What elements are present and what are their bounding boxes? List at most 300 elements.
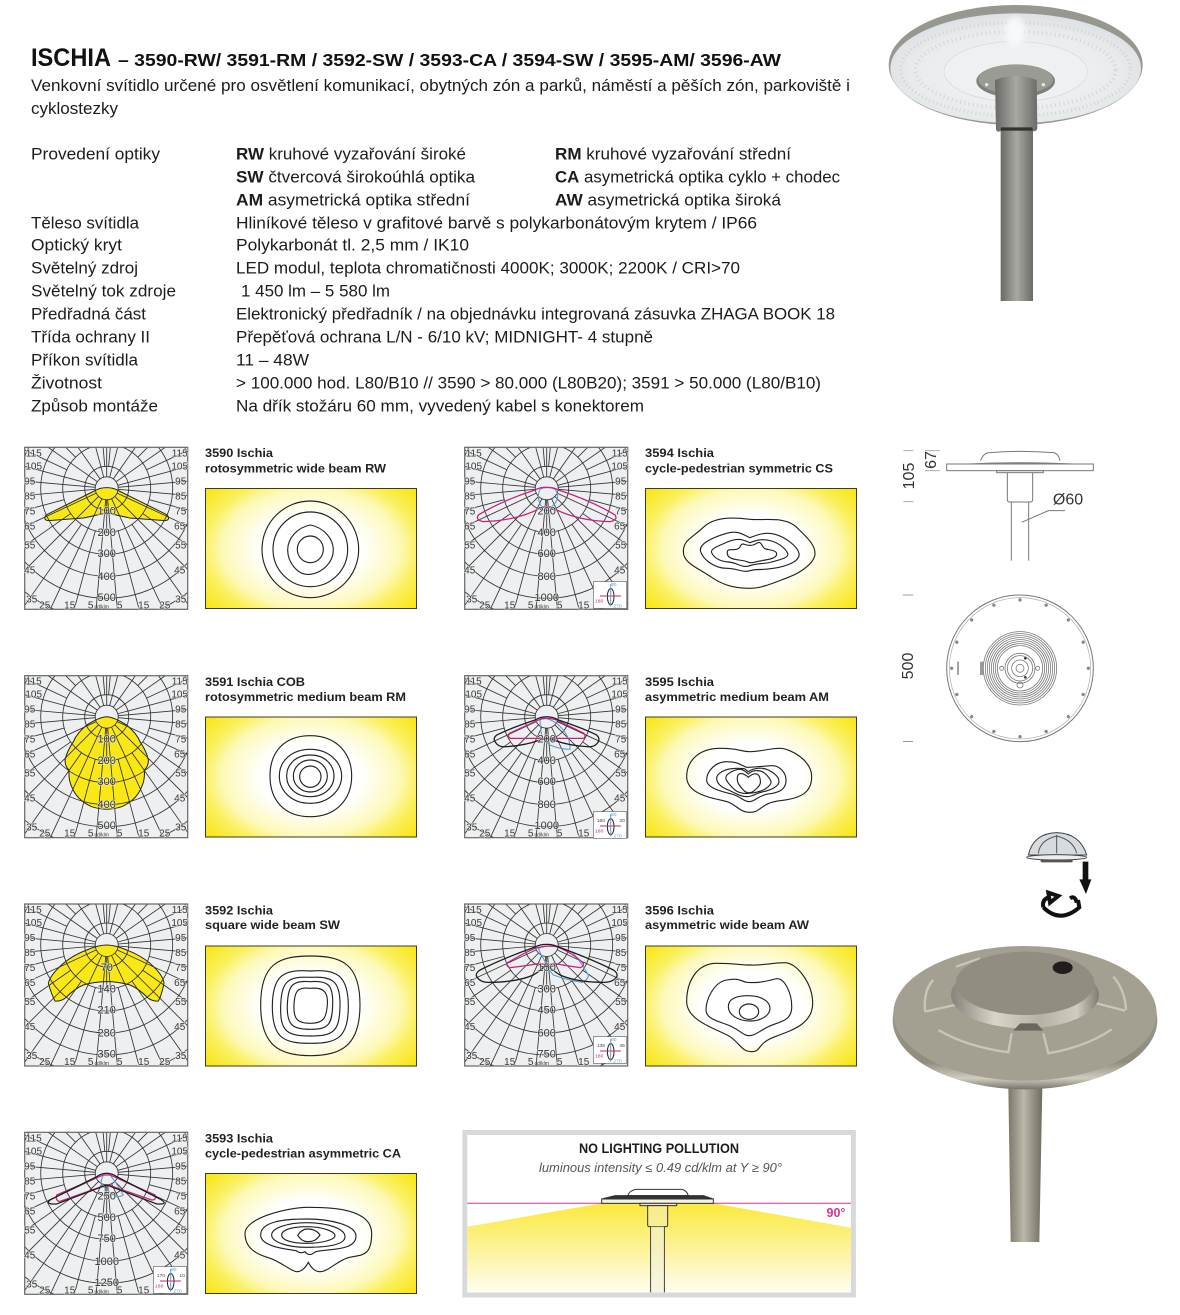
- polar chart 3593: 5: [117, 1285, 123, 1296]
- polar chart 3595: 95: [464, 705, 476, 716]
- polar chart 3594: 1000: [534, 592, 559, 604]
- panel: no lighting pollution: [465, 1132, 853, 1295]
- polar chart 3592: 70: [101, 962, 113, 974]
- polar chart 3592: 65: [174, 978, 186, 989]
- polar chart 3591: 55: [24, 769, 36, 780]
- inset: C-plane key: [593, 582, 627, 609]
- panel heading: NO LIGHTING POLLUTION: [579, 1141, 739, 1156]
- heading 3590: [205, 446, 387, 476]
- polar chart 3593: 105: [171, 1146, 188, 1157]
- illuminance map 3594: [646, 488, 856, 608]
- polar chart 3593: 65: [24, 1206, 36, 1217]
- spec row: cover: [31, 236, 469, 254]
- polar chart 3591: 35: [175, 823, 187, 834]
- polar chart 3590: 105: [25, 461, 42, 472]
- inset: C-plane key: 90: [611, 582, 617, 588]
- polar chart 3594: 65: [614, 521, 626, 532]
- polar chart 3592: 75: [175, 963, 187, 974]
- polar chart 3590: 200: [98, 527, 116, 539]
- inset: C-plane key: 90: [611, 1037, 617, 1043]
- polar chart 3590: 95: [24, 476, 36, 487]
- polar chart 3594: 5: [528, 600, 534, 611]
- polar chart 3596: 5: [528, 1057, 534, 1068]
- inset: C-plane key: [593, 1037, 627, 1064]
- polar chart 3594: 15: [578, 600, 590, 611]
- polar chart 3591: 15: [138, 829, 150, 840]
- polar chart 3591: 75: [24, 735, 36, 746]
- polar chart 3595: 5: [528, 829, 534, 840]
- polar chart 3591: 200: [98, 755, 116, 767]
- polar chart 3595: 25: [479, 829, 491, 840]
- polar chart 3594: 95: [464, 476, 476, 487]
- polar chart 3593: 105: [25, 1146, 42, 1157]
- polar chart 3591: 85: [175, 720, 187, 731]
- inset: C-plane key: 135: [597, 1043, 605, 1049]
- polar chart 3592: 15: [64, 1057, 76, 1068]
- polar chart 3590: 75: [175, 506, 187, 517]
- polar chart 3596: 750: [538, 1048, 556, 1060]
- heading 3592: 3592 Ischia: [205, 904, 273, 918]
- polar chart 3595: 55: [464, 769, 476, 780]
- polar chart 3592: 95: [24, 933, 36, 944]
- polar chart 3595: 115: [466, 677, 482, 688]
- polar chart 3591: 400: [98, 799, 116, 811]
- polar chart 3594: 200: [538, 505, 556, 517]
- polar chart 3591: 95: [24, 705, 36, 716]
- spec row: optics variants: Provedení optiky: [31, 144, 160, 164]
- spec row: optics variants: [31, 144, 840, 210]
- photometric panel: 3591 rotosymmetric medium beam RM: [24, 675, 417, 838]
- polar chart 3594: 25: [479, 600, 491, 611]
- description text: cyklostezky: [31, 99, 118, 118]
- polar chart 3596: 300: [538, 984, 556, 996]
- spec row: mounting: Způsob montáže: [31, 396, 158, 416]
- polar chart 3596: 25: [479, 1057, 491, 1068]
- heading 3594: [645, 446, 833, 476]
- spec row: power: [31, 350, 309, 370]
- heading 3590: rotosymmetric wide beam RW: [205, 462, 387, 476]
- title: ISCHIA: [31, 44, 111, 72]
- spec row: protection class: [31, 328, 653, 346]
- polar chart 3593: 55: [175, 1225, 187, 1236]
- polar chart 3590: 85: [175, 491, 187, 502]
- spec row: optics variants: SW čtvercová širokoúhlá optika: [236, 168, 476, 186]
- polar chart 3593: 1000: [94, 1256, 119, 1268]
- heading 3592: square wide beam SW: [205, 918, 341, 932]
- polar chart 3590: 65: [174, 521, 186, 532]
- polar chart 3593: 15: [64, 1285, 76, 1296]
- spec row: power: Příkon svítidla: [31, 350, 139, 370]
- panel subtitle: luminous intensity ≤ 0.49 cd/klm at Y ≥ 90°: [539, 1161, 782, 1175]
- inset: C-plane key: 270: [613, 603, 622, 609]
- polar chart 3590: 95: [175, 476, 187, 487]
- polar chart 3594: 15: [504, 600, 516, 611]
- heading 3596: 3596 Ischia: [645, 904, 714, 918]
- polar chart 3590: 5: [88, 600, 94, 611]
- spec row: lifetime: Životnost: [31, 374, 102, 392]
- heading 3595: asymmetric medium beam AM: [645, 690, 829, 704]
- polar chart 3590: 25: [159, 600, 171, 611]
- inset: C-plane key: 10: [179, 1273, 185, 1279]
- polar chart 3594: 400: [538, 527, 556, 539]
- polar chart 3591: cd/klm: [94, 833, 109, 839]
- polar chart 3592: 85: [24, 948, 36, 959]
- polar chart 3593: 1250: [94, 1277, 119, 1289]
- polar chart 3590: [24, 446, 188, 610]
- 90 degree label: 90°: [826, 1206, 845, 1220]
- title: [31, 44, 782, 72]
- polar chart 3596: 600: [538, 1028, 556, 1040]
- polar chart 3592: 35: [175, 1051, 187, 1062]
- polar chart 3590: 35: [26, 594, 38, 605]
- polar chart 3593: 15: [138, 1285, 150, 1296]
- technical drawing: side view with dimensions: [901, 451, 1093, 561]
- polar chart 3592: 15: [138, 1057, 150, 1068]
- specification table: [31, 144, 840, 416]
- polar chart 3596: 5: [557, 1057, 563, 1068]
- spec row: mounting: Na dřík stožáru 60 mm, vyvedený kabel s konektorem: [236, 396, 644, 416]
- heading 3590: 3590 Ischia: [205, 446, 273, 460]
- polar chart 3596: 55: [464, 997, 476, 1008]
- spec row: body: Těleso svítidla: [31, 214, 140, 232]
- polar chart 3591: 5: [88, 829, 94, 840]
- polar chart 3592: 25: [39, 1057, 51, 1068]
- polar chart 3592: 65: [24, 978, 36, 989]
- polar chart 3592: 95: [175, 933, 187, 944]
- dimension diameter 60: Ø60: [1053, 492, 1083, 508]
- luminaire silhouette: [602, 1189, 713, 1292]
- spec row: lifetime: > 100.000 hod. L80/B10 // 3590 > 80.000 (L80B20); 3591 > 50.000 (L80/B10): [236, 374, 821, 392]
- polar chart 3592: 5: [88, 1057, 94, 1068]
- illuminance map 3596: [646, 946, 856, 1066]
- polar chart 3590: 100: [98, 505, 116, 517]
- illuminance map 3591: [206, 717, 416, 837]
- polar chart 3595: 65: [464, 750, 476, 761]
- polar chart 3591: 105: [25, 690, 42, 701]
- polar chart 3591: 65: [174, 750, 186, 761]
- heading 3592: [205, 904, 341, 932]
- polar chart 3593: 500: [98, 1212, 116, 1224]
- inset: C-plane key: 20: [619, 818, 625, 824]
- polar chart 3595: 600: [538, 776, 556, 788]
- polar chart 3595: 45: [464, 794, 476, 805]
- spec row: protection class: Přepěťová ochrana L/N - 6/10 kV; MIDNIGHT- 4 stupně: [236, 328, 653, 346]
- heading 3591: rotosymmetric medium beam RM: [205, 690, 406, 704]
- polar chart 3594: 800: [538, 571, 556, 583]
- polar chart 3595: 400: [538, 755, 556, 767]
- arrow: rotate: [1043, 893, 1079, 916]
- polar chart 3590: 300: [98, 548, 116, 560]
- photometric panel: 3594 cycle-pedestrian symmetric CS: [464, 446, 857, 610]
- inset: C-plane key: 180: [595, 829, 604, 835]
- polar chart 3592: 280: [98, 1028, 116, 1040]
- heading 3596: asymmetric wide beam AW: [645, 918, 810, 932]
- spec row: cover: Optický kryt: [31, 236, 122, 254]
- description text: Venkovní svítidlo určené pro osvětlení komunikací, obytných zón a parků, náměstí a pěších zón, parkoviště i: [31, 76, 850, 95]
- spec row: protection class: Třída ochrany II: [31, 328, 150, 346]
- polar chart 3596: 75: [464, 963, 476, 974]
- polar chart 3593: 5: [88, 1285, 94, 1296]
- polar chart 3593: 85: [175, 1176, 187, 1187]
- illuminance map 3590: [206, 488, 416, 608]
- heading 3591: [205, 675, 406, 704]
- heading 3593: cycle-pedestrian asymmetric CA: [205, 1146, 401, 1160]
- polar chart 3596: 115: [466, 905, 482, 916]
- spec row: light source: Světelný zdroj: [31, 258, 138, 278]
- polar chart 3592: 45: [24, 1022, 36, 1033]
- polar chart 3590: 45: [174, 565, 186, 576]
- polar chart 3592: 5: [117, 1057, 123, 1068]
- polar chart 3596: [464, 903, 628, 1067]
- 90 degree line: [467, 1202, 851, 1204]
- polar chart 3593: 55: [24, 1225, 36, 1236]
- polar chart 3594: 600: [538, 548, 556, 560]
- polar chart 3593: 115: [26, 1133, 42, 1144]
- polar chart 3591: 65: [24, 750, 36, 761]
- spec row: luminous flux: 1 450 lm – 5 580 lm: [241, 282, 390, 300]
- polar chart 3590: 85: [24, 491, 36, 502]
- spec row: cover: Polykarbonát tl. 2,5 mm / IK10: [236, 236, 469, 254]
- polar chart 3595: 15: [504, 829, 516, 840]
- polar chart 3593: 75: [175, 1191, 187, 1202]
- polar chart 3592: 115: [26, 905, 42, 916]
- polar chart 3591: 300: [98, 776, 116, 788]
- polar chart 3590: 45: [24, 565, 36, 576]
- polar chart 3592: 105: [171, 918, 188, 929]
- polar chart 3595: 45: [614, 794, 626, 805]
- polar chart 3593: 25: [39, 1285, 51, 1296]
- polar chart 3591: 5: [117, 829, 123, 840]
- polar chart 3591: 115: [26, 677, 42, 688]
- polar chart 3596: 55: [615, 997, 627, 1008]
- polar chart 3591: 25: [39, 829, 51, 840]
- polar chart 3595: [464, 675, 628, 839]
- polar chart 3590: 35: [175, 594, 187, 605]
- polar chart 3595: 65: [614, 750, 626, 761]
- polar chart 3596: 75: [615, 963, 627, 974]
- polar chart 3594: 105: [611, 461, 628, 472]
- polar chart 3591: 45: [174, 794, 186, 805]
- icon: cable connector knob: [1053, 961, 1073, 974]
- inset: C-plane key: [153, 1267, 187, 1294]
- polar chart 3593: 115: [172, 1133, 188, 1144]
- illuminance map 3595: [646, 717, 856, 837]
- polar chart 3593: 75: [24, 1191, 36, 1202]
- polar chart 3590: 105: [171, 461, 188, 472]
- polar chart 3593: 45: [24, 1250, 36, 1261]
- polar chart 3596: 15: [578, 1057, 590, 1068]
- spec row: luminous flux: Světelný tok zdroje: [31, 282, 176, 300]
- polar chart 3591: 95: [175, 705, 187, 716]
- polar chart 3593: 95: [175, 1161, 187, 1172]
- polar chart 3592: 25: [159, 1057, 171, 1068]
- polar chart 3591: 35: [26, 823, 38, 834]
- inset: C-plane key: 160: [597, 818, 605, 824]
- polar chart 3593: 35: [26, 1279, 38, 1290]
- illuminance map 3592: [206, 946, 416, 1066]
- polar chart 3591: 75: [175, 735, 187, 746]
- polar chart 3592: 115: [172, 905, 188, 916]
- polar chart 3595: cd/klm: [534, 833, 549, 839]
- illuminance map 3593: [206, 1174, 416, 1294]
- polar chart 3594: 45: [464, 565, 476, 576]
- polar chart 3594: 105: [465, 461, 482, 472]
- inset: C-plane key: 180: [595, 1054, 604, 1060]
- polar chart 3596: 65: [614, 978, 626, 989]
- technical drawing: top view with dimension: [900, 595, 1093, 742]
- polar chart 3592: 210: [98, 1004, 116, 1016]
- polar chart 3596: 15: [504, 1057, 516, 1068]
- polar chart 3594: 35: [466, 594, 478, 605]
- dimension 105: 105: [901, 463, 918, 489]
- spec row: optics variants: AW asymetrická optika široká: [555, 190, 782, 210]
- polar chart 3593: [24, 1132, 188, 1295]
- polar chart 3592: 45: [174, 1022, 186, 1033]
- polar chart 3595: 75: [615, 735, 627, 746]
- polar chart 3595: 35: [466, 823, 478, 834]
- polar chart 3596: 85: [464, 948, 476, 959]
- heading 3595: [645, 675, 829, 704]
- spec row: optics variants: AM asymetrická optika střední: [236, 190, 470, 210]
- polar chart 3592: 75: [24, 963, 36, 974]
- photometric panel: 3596 asymmetric wide beam AW: [464, 903, 857, 1067]
- polar chart 3594: 55: [615, 540, 627, 551]
- polar chart 3591: [24, 675, 188, 838]
- polar chart 3594: 45: [614, 565, 626, 576]
- polar chart 3592: 105: [25, 918, 42, 929]
- polar chart 3593: cd/klm: [94, 1289, 109, 1295]
- inset: C-plane key: 90: [611, 812, 617, 818]
- icon: cover installation with arrows: [1027, 833, 1091, 916]
- polar chart 3593: 95: [24, 1161, 36, 1172]
- polar chart 3592: 140: [98, 984, 116, 996]
- polar chart 3594: 95: [615, 476, 627, 487]
- inset: C-plane key: 45: [619, 1043, 625, 1049]
- polar chart 3592: 85: [175, 948, 187, 959]
- polar chart 3596: 105: [465, 918, 482, 929]
- spec row: light source: LED modul, teplota chromatičnosti 4000K; 3000K; 2200K / CRI>70: [236, 258, 740, 278]
- photometric panel: 3592 square wide beam SW: [24, 903, 417, 1067]
- polar chart 3590: 65: [24, 521, 36, 532]
- photo: luminaire from above: [893, 946, 1157, 1242]
- polar chart 3594: 75: [464, 506, 476, 517]
- polar chart 3590: 500: [98, 592, 116, 604]
- arrow: down: [1079, 862, 1091, 894]
- polar chart 3590: 75: [24, 506, 36, 517]
- heading 3596: [645, 904, 810, 932]
- polar chart 3591: 85: [24, 720, 36, 731]
- polar chart 3596: 45: [464, 1022, 476, 1033]
- polar chart 3591: 25: [159, 829, 171, 840]
- polar chart 3595: 75: [464, 735, 476, 746]
- polar chart 3591: 115: [172, 677, 188, 688]
- polar chart 3595: 95: [615, 705, 627, 716]
- inset: C-plane key: 90: [171, 1267, 177, 1273]
- polar chart 3591: 100: [98, 734, 116, 746]
- inset: C-plane key: 180: [595, 599, 604, 605]
- polar chart 3594: 115: [612, 448, 628, 459]
- heading 3593: [205, 1132, 401, 1160]
- polar chart 3590: 15: [138, 600, 150, 611]
- spec row: optics variants: RW kruhové vyzařování široké: [236, 144, 466, 164]
- polar chart 3596: 45: [614, 1022, 626, 1033]
- polar chart 3596: 95: [464, 933, 476, 944]
- polar chart 3593: 250: [98, 1190, 116, 1202]
- polar chart 3593: 45: [174, 1250, 186, 1261]
- description text: [31, 76, 850, 118]
- polar chart 3596: 115: [612, 905, 628, 916]
- heading 3595: 3595 Ischia: [645, 675, 714, 689]
- polar chart 3596: 95: [615, 933, 627, 944]
- spec row: luminous flux: [31, 282, 390, 300]
- inset: C-plane key: 270: [613, 1058, 622, 1064]
- polar chart 3593: 85: [24, 1176, 36, 1187]
- inset: C-plane key: [593, 812, 627, 839]
- polar chart 3595: 85: [615, 720, 627, 731]
- polar chart 3593: 65: [174, 1206, 186, 1217]
- spec row: body: Hliníkové těleso v grafitové barvě s polykarbonátovým krytem / IP66: [236, 214, 757, 232]
- polar chart 3592: 350: [98, 1048, 116, 1060]
- polar chart 3595: 200: [538, 734, 556, 746]
- polar chart 3591: 15: [64, 829, 76, 840]
- polar chart 3592: [24, 903, 188, 1067]
- polar chart 3591: 500: [98, 820, 116, 832]
- polar chart 3591: 105: [171, 690, 188, 701]
- polar chart 3590: cd/klm: [94, 604, 109, 610]
- photometric panel: 3590 rotosymmetric wide beam RW: [24, 446, 417, 610]
- polar chart 3592: cd/klm: [94, 1061, 109, 1067]
- polar chart 3590: 5: [117, 600, 123, 611]
- polar chart 3590: 55: [24, 540, 36, 551]
- photo: luminaire from below: [889, 5, 1143, 301]
- inset: C-plane key: 180: [155, 1284, 164, 1290]
- polar chart 3595: 800: [538, 799, 556, 811]
- dimension 67: 67: [923, 451, 940, 469]
- polar chart 3590: 15: [64, 600, 76, 611]
- polar chart 3596: 150: [538, 962, 556, 974]
- polar chart 3590: 115: [26, 448, 42, 459]
- polar chart 3590: 55: [175, 540, 187, 551]
- polar chart 3594: 55: [464, 540, 476, 551]
- polar chart 3594: 65: [464, 521, 476, 532]
- polar chart 3596: 65: [464, 978, 476, 989]
- polar chart 3594: cd/klm: [534, 604, 549, 610]
- spec row: driver: Předřadná část: [31, 304, 146, 324]
- heading 3594: cycle-pedestrian symmetric CS: [645, 462, 833, 476]
- polar chart 3593: 750: [98, 1233, 116, 1245]
- polar chart 3595: 115: [612, 677, 628, 688]
- spec row: driver: Elektronický předřadník / na objednávku integrovaná zásuvka ZHAGA BOOK 18: [236, 304, 835, 324]
- polar chart 3594: 85: [615, 491, 627, 502]
- polar chart 3595: 85: [464, 720, 476, 731]
- polar chart 3595: 15: [578, 829, 590, 840]
- polar chart 3591: 45: [24, 794, 36, 805]
- polar chart 3594: 115: [466, 448, 482, 459]
- inset: C-plane key: 270: [613, 833, 622, 839]
- heading 3591: 3591 Ischia COB: [205, 675, 305, 689]
- title: – 3590-RW/ 3591-RM / 3592-SW / 3593-CA / 3594-SW / 3595-AM/ 3596-AW: [118, 50, 782, 70]
- heading 3593: 3593 Ischia: [205, 1132, 273, 1146]
- polar chart 3596: 35: [466, 1051, 478, 1062]
- polar chart 3596: 450: [538, 1004, 556, 1016]
- heading 3594: 3594 Ischia: [645, 446, 714, 460]
- polar chart 3596: cd/klm: [534, 1061, 549, 1067]
- polar chart 3590: 400: [98, 571, 116, 583]
- polar chart 3590: 115: [172, 448, 188, 459]
- polar chart 3591: 55: [175, 769, 187, 780]
- polar chart 3592: 55: [175, 997, 187, 1008]
- polar chart 3595: 55: [615, 769, 627, 780]
